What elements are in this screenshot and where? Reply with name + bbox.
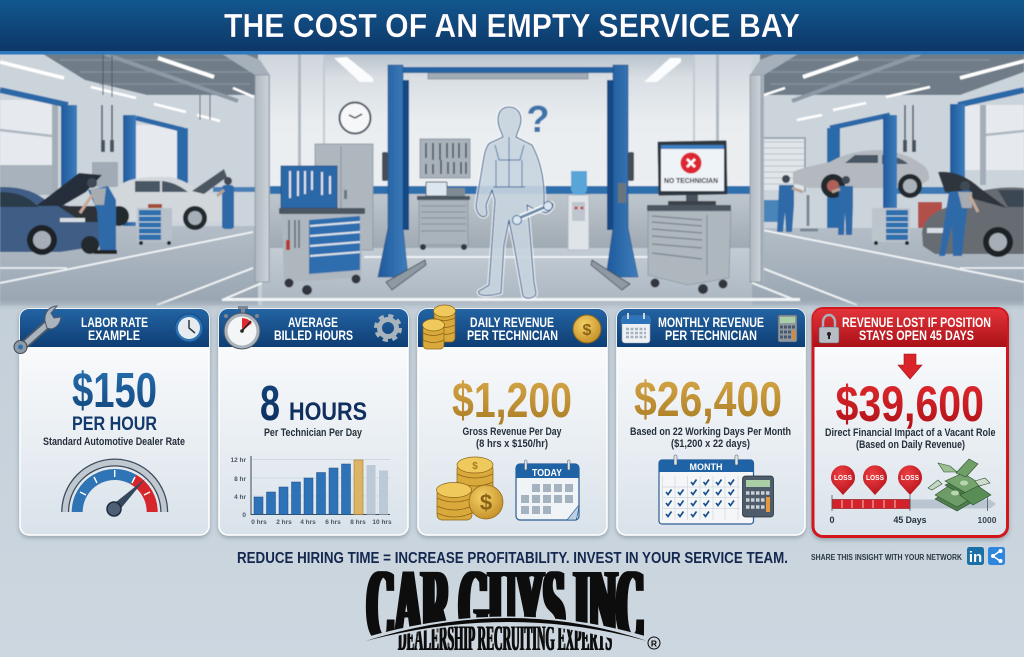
blue rolling tool chest xyxy=(279,208,365,295)
heading: DAILY REVENUE xyxy=(470,314,554,330)
timeline: loss over 45 days: LOSS xyxy=(901,473,919,482)
caption xyxy=(825,427,996,451)
icon: coin stacks xyxy=(422,305,456,349)
ghost technician silhouette xyxy=(476,107,553,298)
right bay with working technicians xyxy=(750,54,1024,306)
big number: $26,400 xyxy=(634,373,782,427)
caption: (8 hrs x $150/hr) xyxy=(476,438,548,450)
heading: STAYS OPEN 45 DAYS xyxy=(859,327,974,343)
tagline: REDUCE HIRING TIME = INCREASE PROFITABILITY. INVEST IN YOUR SERVICE TEAM. xyxy=(237,550,788,567)
heading xyxy=(658,314,764,343)
wall clock xyxy=(340,102,370,134)
gray car xyxy=(922,172,1024,257)
bar chart: 8 hr xyxy=(234,476,246,483)
title banner xyxy=(0,0,1024,54)
heading: BILLED HOURS xyxy=(274,327,353,343)
icon: share xyxy=(988,547,1005,565)
icon: month calendar with checks: MONTH xyxy=(690,462,723,473)
no technician monitor xyxy=(658,140,727,205)
icon: month calendar with checks xyxy=(659,455,754,524)
bar chart: 4 hr xyxy=(234,494,246,501)
no technician monitor: NO TECHNICIAN xyxy=(664,176,718,185)
icon: gold coins: $ xyxy=(480,490,492,515)
caption xyxy=(462,426,562,450)
gray storage cabinet xyxy=(315,144,373,250)
caption: Gross Revenue Per Day xyxy=(462,426,562,438)
bar chart: 10 hrs xyxy=(372,519,392,526)
icon: dollar coin xyxy=(573,315,601,343)
icon: gear xyxy=(376,316,400,340)
panel: monthly revenue xyxy=(617,309,805,535)
panel: labor rate xyxy=(14,306,209,535)
blue tool board xyxy=(281,166,337,208)
caption: (Based on Daily Revenue) xyxy=(856,439,965,451)
bar chart: 0 hrs xyxy=(251,519,267,526)
tool cart xyxy=(137,204,172,245)
timeline: loss over 45 days: 45 Days xyxy=(894,515,926,525)
timeline: loss over 45 days: 0 xyxy=(829,515,835,525)
icon: wrench xyxy=(14,306,61,354)
panel: revenue lost xyxy=(813,308,1008,536)
heading: EXAMPLE xyxy=(88,327,140,343)
icon: calculator xyxy=(778,315,797,342)
timeline: loss over 45 days: 1000 xyxy=(978,515,997,525)
caption: ($1,200 x 22 days) xyxy=(671,438,750,450)
caption: Per Technician Per Day xyxy=(264,427,363,439)
icon: calculator large xyxy=(742,476,774,517)
two-post vehicle lift xyxy=(378,65,638,290)
icon: pile of cash xyxy=(928,459,991,511)
bar chart: 4 hrs xyxy=(300,519,316,526)
bar chart: 2 hrs xyxy=(276,519,292,526)
panel: billed hours xyxy=(219,306,408,535)
gray rolling tool chest xyxy=(647,205,731,294)
tablet and center tool chest xyxy=(417,182,470,250)
heading xyxy=(842,314,991,343)
icon: stopwatch xyxy=(224,306,260,349)
technician at gray car xyxy=(939,181,978,256)
logo: car guys inc: R xyxy=(651,638,657,648)
gauge xyxy=(65,463,164,516)
caption xyxy=(630,426,791,450)
timeline: loss over 45 days: LOSS xyxy=(834,473,852,482)
heading: LABOR RATE xyxy=(81,314,148,330)
big number: $1,200 xyxy=(452,374,572,428)
blue car xyxy=(0,173,102,255)
icon: calendar xyxy=(622,313,650,343)
title: THE COST OF AN EMPTY SERVICE BAY xyxy=(224,7,800,44)
bar chart: 12 hr xyxy=(230,457,246,464)
left bay with working technicians xyxy=(0,54,270,306)
caption: Standard Automotive Dealer Rate xyxy=(43,436,185,448)
timeline: loss over 45 days: LOSS xyxy=(866,473,884,482)
panel: daily revenue xyxy=(418,305,607,535)
bar chart xyxy=(230,456,392,526)
heading xyxy=(81,314,148,343)
white SUV xyxy=(109,169,228,230)
tool cart xyxy=(872,208,910,245)
caption: Based on 22 Working Days Per Month xyxy=(630,426,791,438)
icon: clock xyxy=(175,314,203,342)
big number: 8 xyxy=(260,377,280,431)
bar chart: 6 hrs xyxy=(325,519,341,526)
heading: MONTHLY REVENUE xyxy=(658,314,764,330)
arrow: red down xyxy=(898,354,922,379)
technicians under lift xyxy=(777,175,853,235)
icon: gold coins xyxy=(436,457,503,520)
icon: today calendar: TODAY xyxy=(532,468,562,479)
logo: car guys inc xyxy=(366,571,660,650)
illustration: service bay scene xyxy=(0,54,1024,309)
timeline: loss over 45 days xyxy=(829,465,997,525)
icon: padlock xyxy=(819,315,839,343)
bar chart: 0 xyxy=(242,512,246,519)
heading: AVERAGE xyxy=(288,314,338,330)
unit: PER HOUR xyxy=(72,413,157,435)
big number: $39,600 xyxy=(836,376,984,432)
lift with raised silver car xyxy=(793,115,929,228)
icon: dollar coin: $ xyxy=(583,322,592,339)
icon: gold coins: $ xyxy=(472,461,478,472)
unit: HOURS xyxy=(289,398,367,426)
heading xyxy=(274,314,353,343)
technician at SUV xyxy=(217,177,234,229)
heading xyxy=(467,314,558,343)
big number: $150 xyxy=(72,364,157,418)
center empty bay xyxy=(222,54,800,306)
icon: today calendar xyxy=(516,460,579,520)
heading: PER TECHNICIAN xyxy=(467,327,558,343)
water cooler xyxy=(568,171,589,250)
icon: linkedin: in xyxy=(969,549,982,566)
technician at blue car xyxy=(80,178,117,254)
bar chart: 8 hrs xyxy=(350,519,366,526)
heading: PER TECHNICIAN xyxy=(665,327,757,343)
pegboard with tools xyxy=(420,139,470,178)
share prompt: SHARE THIS INSIGHT WITH YOUR NETWORK xyxy=(811,553,962,562)
question mark: ? xyxy=(526,99,550,141)
